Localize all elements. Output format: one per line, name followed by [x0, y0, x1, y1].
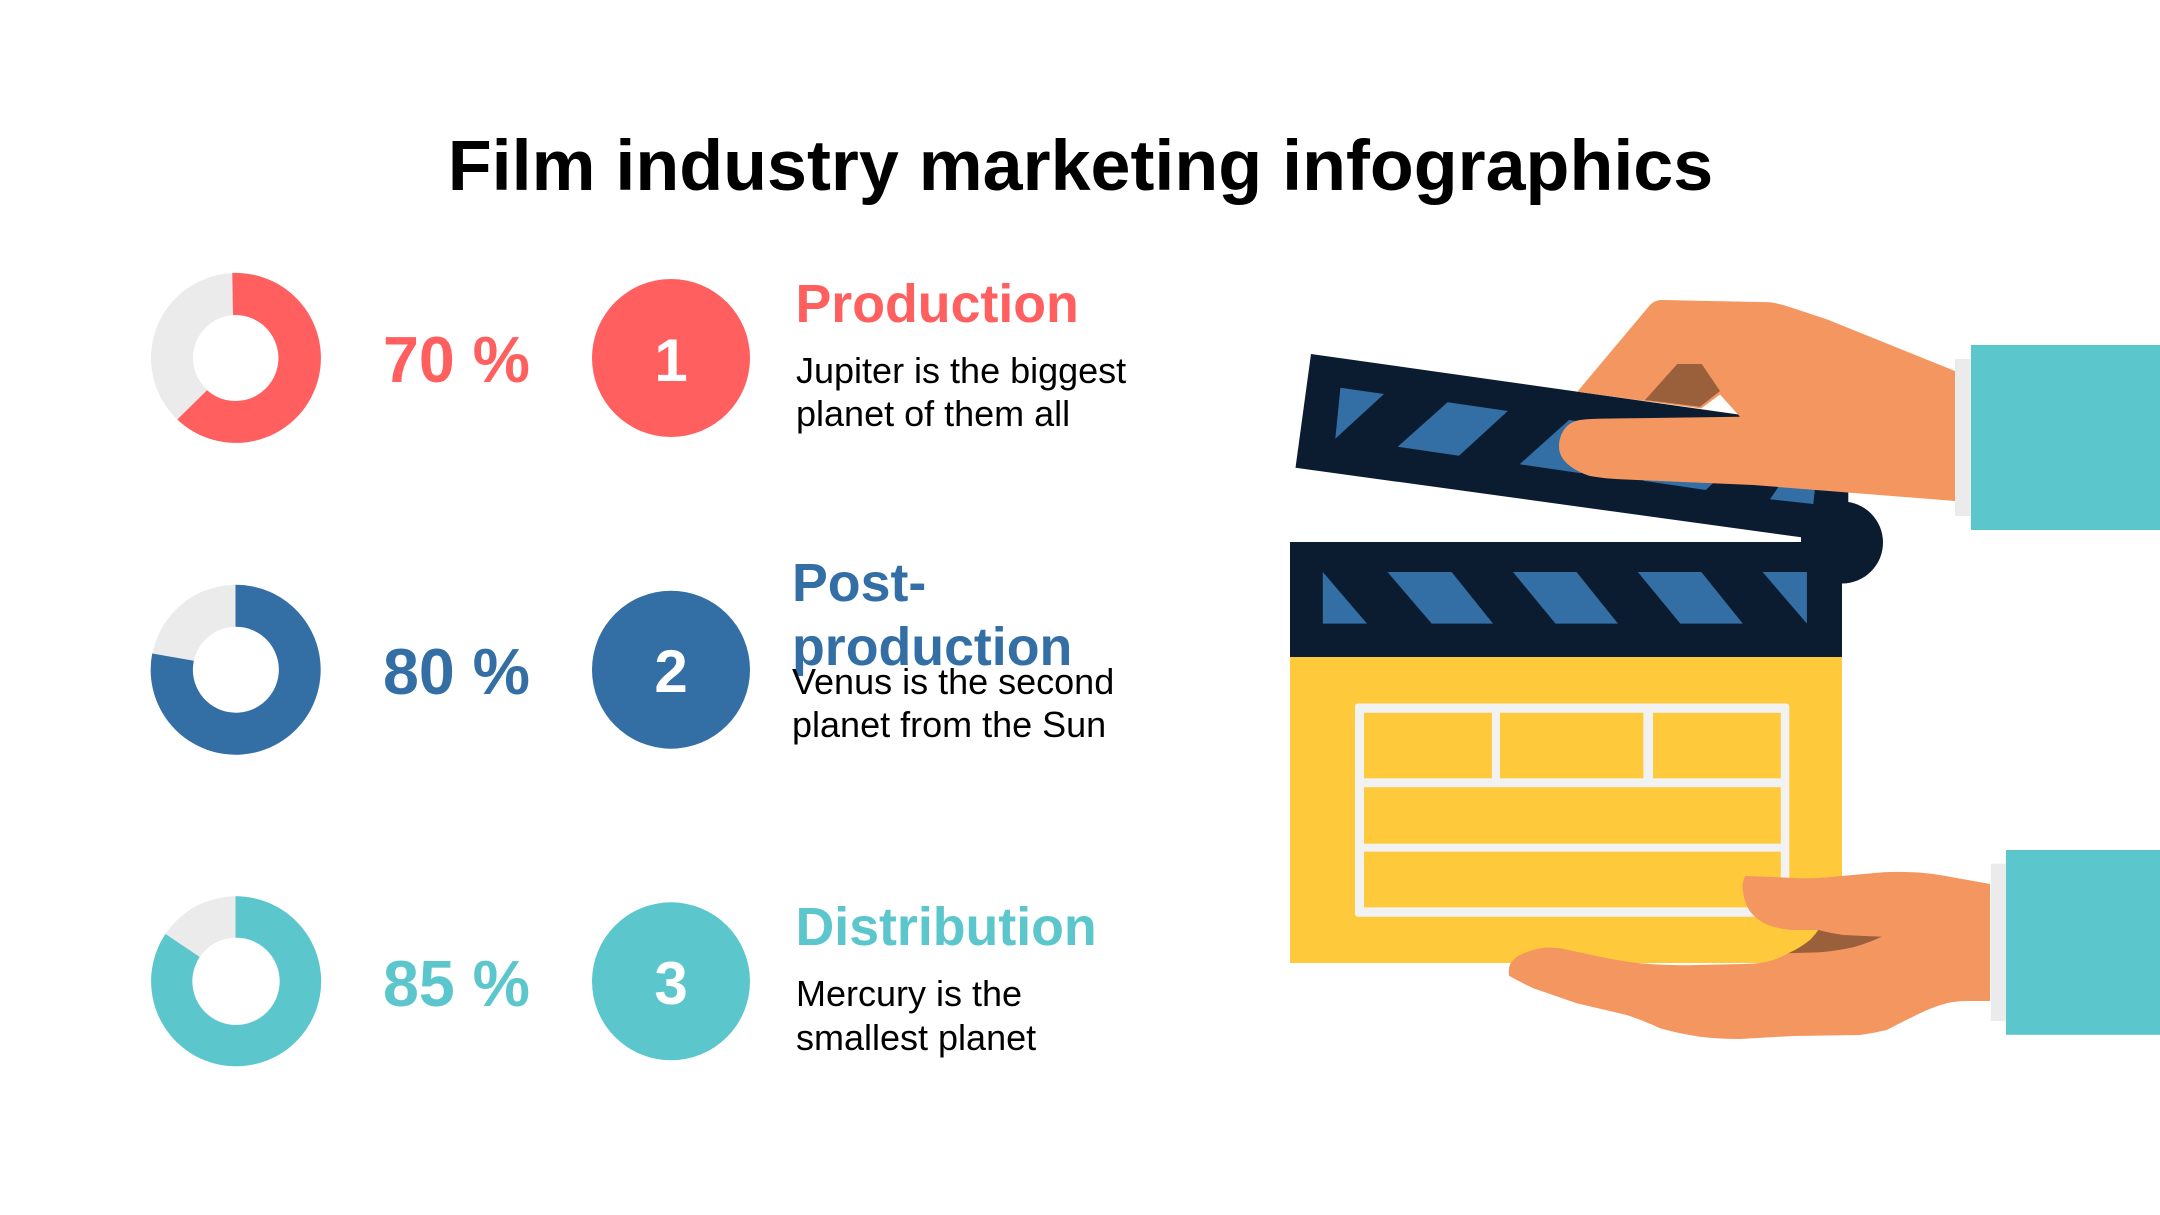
- percentage: 70 %: 70 %: [383, 324, 530, 396]
- number badge 2: [592, 591, 750, 749]
- slate grid: [1355, 704, 1789, 917]
- illustration: clapperboard held by two hands: [1290, 300, 2160, 1039]
- palm shadow: [1788, 930, 1882, 953]
- finger shadow: [1645, 364, 1720, 407]
- panel: production row: [172, 273, 1126, 443]
- text block: Production description: Jupiter is the biggest: [796, 350, 1126, 391]
- panel: distribution row: [151, 896, 1097, 1066]
- number badge 2: 2: [654, 638, 688, 705]
- title: Film industry marketing infographics: [448, 126, 1713, 206]
- shirt cuff: [1991, 864, 2008, 1021]
- shirt cuff: [1955, 359, 1973, 516]
- top hand with sleeve: [1559, 300, 2160, 530]
- hand: [1509, 872, 1990, 1039]
- number badge 3: [592, 902, 750, 1060]
- text block: Post-production description: planet from the Sun: [792, 704, 1106, 745]
- text block: Distribution description: smallest planet: [796, 1017, 1036, 1058]
- text block: Post-production description: Venus is the second: [792, 661, 1114, 702]
- heading: Production: Production: [796, 274, 1079, 334]
- donut chart: 70 percent: [172, 273, 321, 443]
- text block: Distribution description: Mercury is the: [796, 973, 1022, 1014]
- donut chart: 80 percent: [151, 585, 321, 755]
- number badge 3: 3: [654, 950, 688, 1017]
- clapperboard: [1290, 354, 1883, 963]
- bottom hand with sleeve: [1509, 850, 2160, 1039]
- number badge 1: 1: [654, 327, 688, 394]
- percentage: 85 %: 85 %: [383, 948, 530, 1020]
- clapper top stick: [1296, 354, 1848, 560]
- heading: Distribution: Distribution: [796, 897, 1097, 957]
- heading: Post-production: production: [792, 617, 1072, 677]
- donut chart: 85 percent: [151, 896, 321, 1066]
- clapper board body: [1290, 657, 1842, 963]
- sleeve: [1971, 345, 2160, 530]
- sleeve: [2006, 850, 2160, 1035]
- hand: [1559, 300, 1955, 501]
- hinge: [1801, 502, 1883, 584]
- clapper lower stick: [1290, 542, 1842, 657]
- panel: post-production row: [151, 553, 1114, 755]
- heading: Post-production: Post-: [792, 553, 926, 613]
- number badge 1: [592, 279, 750, 437]
- text block: Production description: planet of them all: [796, 393, 1070, 434]
- percentage: 80 %: 80 %: [383, 636, 530, 708]
